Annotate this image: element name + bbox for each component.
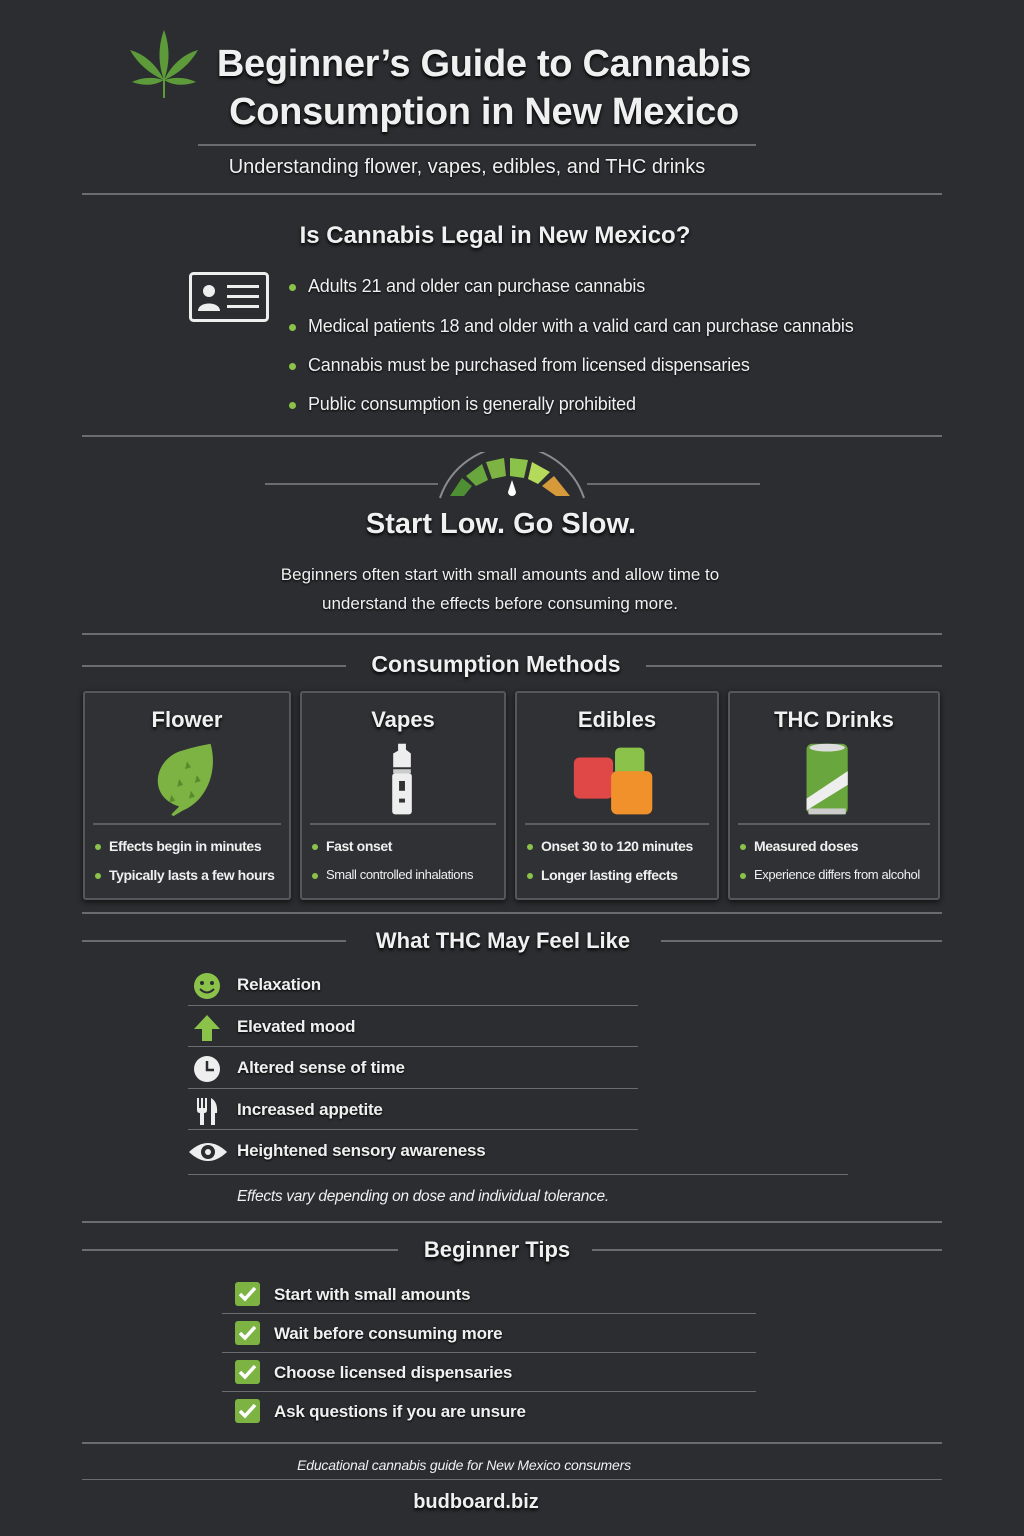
icon: check	[235, 1321, 260, 1345]
footer brand: budboard.biz	[413, 1491, 539, 1513]
panel: flower: Effects begin in minutes	[109, 838, 261, 854]
panel: THC drinks: Measured doses	[754, 838, 858, 854]
panel: vapes: Fast onset	[326, 838, 392, 854]
heading: consumption methods: Consumption Methods	[371, 651, 621, 677]
list: tips: Wait before consuming more	[274, 1324, 502, 1343]
panel: vapes: Small controlled inhalations	[326, 867, 473, 882]
icon: flower bud	[158, 744, 213, 816]
icon: gummy cubes	[574, 748, 652, 814]
list: effects: Heightened sensory awareness	[237, 1141, 486, 1160]
icon: gauge	[439, 452, 585, 498]
icon: up arrow	[194, 1015, 220, 1041]
list: tips: Choose licensed dispensaries	[274, 1363, 512, 1382]
list: tips: Start with small amounts	[274, 1285, 470, 1304]
list: effects: Altered sense of time	[237, 1058, 405, 1077]
text: start low paragraph: understand the effects before consuming more.	[322, 594, 678, 613]
icon: cannabis leaf	[130, 30, 198, 98]
icon: check	[235, 1360, 260, 1384]
bullet list: legal	[289, 276, 854, 416]
list: effects: Increased appetite	[237, 1100, 383, 1119]
panel: THC drinks: THC Drinks	[774, 707, 894, 732]
icon: smiley	[194, 973, 220, 999]
panel: vapes	[300, 691, 506, 900]
icon: vape pen	[392, 744, 412, 814]
text: effects note: Effects vary depending on dose and individual tolerance.	[237, 1188, 609, 1205]
panel: THC drinks: Experience differs from alcohol	[754, 867, 920, 882]
list: tips	[222, 1282, 756, 1423]
text: start low paragraph	[281, 565, 720, 614]
icon: can	[806, 744, 848, 814]
footer note: Educational cannabis guide for New Mexico consumers	[297, 1457, 631, 1473]
heading: start low: Start Low. Go Slow.	[366, 508, 636, 540]
title	[217, 43, 751, 136]
panel: edibles: Edibles	[578, 707, 656, 732]
icon: fork and knife	[197, 1098, 218, 1125]
panel: edibles: Longer lasting effects	[541, 867, 678, 883]
heading: beginner tips: Beginner Tips	[424, 1237, 570, 1262]
bullet list: legal: Cannabis must be purchased from licensed dispensaries	[308, 355, 750, 375]
heading: legal: Is Cannabis Legal in New Mexico?	[300, 222, 690, 249]
icon: eye	[189, 1143, 227, 1161]
bullet list: legal: Public consumption is generally prohibited	[308, 394, 636, 414]
list: effects: Relaxation	[237, 975, 321, 994]
panel: edibles: Onset 30 to 120 minutes	[541, 838, 693, 854]
panel: vapes: Vapes	[371, 707, 435, 732]
panel: flower: Typically lasts a few hours	[109, 867, 275, 883]
title: Beginner’s Guide to Cannabis	[217, 43, 751, 85]
bullet list: legal: Medical patients 18 and older with a valid card can purchase cannabis	[308, 316, 854, 336]
icon: ID card	[189, 272, 269, 322]
list: effects	[188, 973, 848, 1175]
heading: what THC may feel like: What THC May Feel Like	[376, 928, 630, 953]
panel: THC drinks	[728, 691, 940, 900]
title: Consumption in New Mexico	[229, 91, 739, 133]
bullet list: legal: Adults 21 and older can purchase cannabis	[308, 276, 645, 296]
panel: flower	[83, 691, 291, 900]
panel: flower: Flower	[152, 707, 222, 732]
section: legality	[189, 222, 854, 416]
icon: check	[235, 1282, 260, 1306]
icon: check	[235, 1399, 260, 1423]
list: effects: Elevated mood	[237, 1017, 355, 1036]
subtitle: Understanding flower, vapes, edibles, and THC drinks	[229, 156, 705, 178]
text: start low paragraph: Beginners often start with small amounts and allow time to	[281, 565, 719, 584]
list: tips: Ask questions if you are unsure	[274, 1402, 526, 1421]
icon: clock	[194, 1056, 220, 1082]
panel: edibles	[515, 691, 719, 900]
